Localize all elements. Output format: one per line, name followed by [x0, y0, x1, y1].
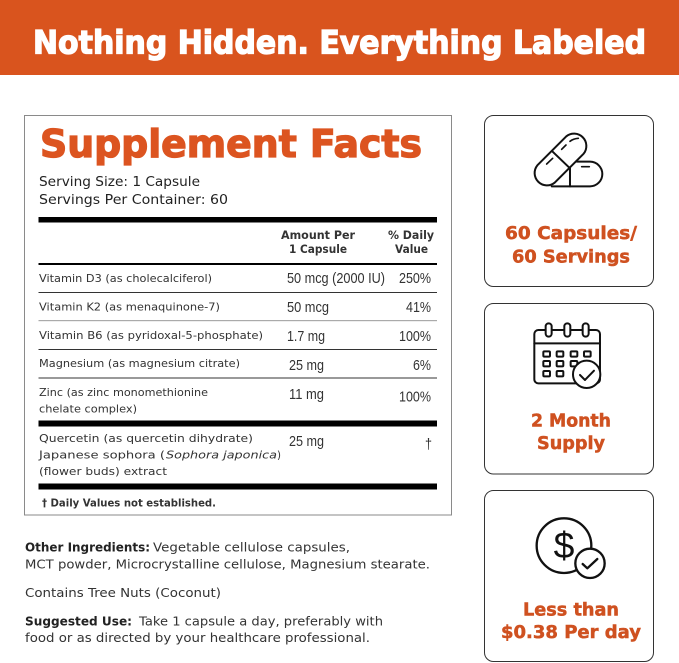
text block: suggested use: Take 1 capsule a day, preferably with	[138, 614, 383, 628]
row: magnesium: 25 mg	[289, 357, 324, 374]
row: vitamin D3: 250%	[399, 270, 431, 287]
label: 60 capsules / 60 servings: 60 Servings	[512, 248, 630, 268]
row: vitamin K2: 41%	[406, 299, 431, 316]
label: 60 capsules / 60 servings	[505, 224, 638, 268]
text block: other ingredients: MCT powder, Microcrystalline cellulose, Magnesium stearate.	[25, 556, 430, 572]
column header: amount per capsule: Amount Per	[281, 228, 355, 242]
panel: price card	[484, 490, 654, 662]
icon: calendar with check	[534, 323, 600, 388]
row: vitamin K2: 50 mcg	[287, 299, 329, 316]
row: vitamin B6: 1.7 mg	[287, 328, 325, 345]
text block: other ingredients	[25, 540, 430, 572]
column header: amount per capsule	[281, 228, 355, 256]
serving information: Serving Size: 1 Capsule	[39, 174, 200, 190]
icon: capsules	[535, 134, 602, 186]
column header: percent daily value	[388, 228, 434, 256]
panel: supply card	[484, 304, 654, 474]
row: magnesium: Magnesium (as magnesium citrate)	[39, 357, 240, 370]
row: quercetin: Sophora japonica	[166, 448, 277, 462]
text block: other ingredients: Other Ingredients:	[25, 540, 150, 554]
row: quercetin	[38, 432, 432, 478]
label: 2 month supply	[531, 412, 611, 454]
heading: supplement facts: Supplement Facts	[40, 122, 422, 166]
text block: allergen statement: Contains Tree Nuts (Coconut)	[25, 585, 221, 600]
row: vitamin K2: Vitamin K2 (as menaquinone-7)	[39, 300, 220, 314]
text block: suggested use	[25, 614, 383, 645]
text block: other ingredients: Vegetable cellulose capsules,	[153, 540, 350, 554]
serving information: Servings Per Container: 60	[39, 192, 228, 208]
label: 2 month supply: 2 Month	[531, 412, 611, 432]
footnote: † Daily Values not established.	[42, 498, 216, 510]
row: vitamin K2	[39, 299, 431, 316]
row: zinc: 100%	[399, 388, 431, 406]
row: quercetin: †	[425, 436, 432, 453]
label: less than $0.38 per day	[501, 600, 642, 643]
row: quercetin: 25 mg	[289, 433, 324, 450]
row: zinc: 11 mg	[289, 386, 324, 403]
row: vitamin D3	[39, 270, 431, 287]
serving information	[39, 174, 228, 208]
label: 2 month supply: Supply	[537, 434, 606, 454]
label: less than $0.38 per day: Less than	[523, 600, 619, 620]
panel: capsules card	[484, 116, 654, 286]
row: magnesium	[39, 357, 431, 374]
title: Nothing Hidden. Everything Labeled	[33, 24, 646, 62]
row: magnesium: 6%	[413, 357, 431, 374]
header banner	[0, 0, 679, 75]
row: vitamin D3: Vitamin D3 (as cholecalciferol)	[39, 272, 212, 285]
row: vitamin D3: 50 mcg (2000 IU)	[287, 270, 385, 287]
column header: percent daily value: Value	[395, 242, 428, 256]
label: 60 capsules / 60 servings: 60 Capsules/	[505, 224, 638, 244]
label: less than $0.38 per day: $0.38 Per day	[501, 623, 642, 643]
row: vitamin B6	[39, 328, 431, 345]
panel: supplement facts	[24, 116, 452, 515]
icon: dollar coin with check: $	[554, 524, 575, 566]
row: zinc: Zinc (as zinc monomethionine	[39, 386, 208, 399]
icon: dollar coin with check	[537, 518, 605, 578]
row: quercetin: (flower buds) extract	[39, 465, 168, 478]
row: vitamin B6: 100%	[399, 328, 431, 345]
row: quercetin: Japanese sophora (	[38, 448, 165, 462]
column header: percent daily value: % Daily	[388, 228, 434, 242]
row: quercetin: Quercetin (as quercetin dihydrate)	[39, 432, 253, 445]
text block: suggested use: food or as directed by your healthcare professional.	[25, 630, 370, 645]
row: vitamin B6: Vitamin B6 (as pyridoxal-5-phosphate)	[39, 329, 263, 342]
text block: suggested use: Suggested Use:	[25, 614, 132, 628]
row: zinc	[39, 386, 431, 416]
row: quercetin: )	[277, 448, 281, 462]
column header: amount per capsule: 1 Capsule	[289, 242, 347, 256]
row: zinc: chelate complex)	[39, 402, 137, 416]
